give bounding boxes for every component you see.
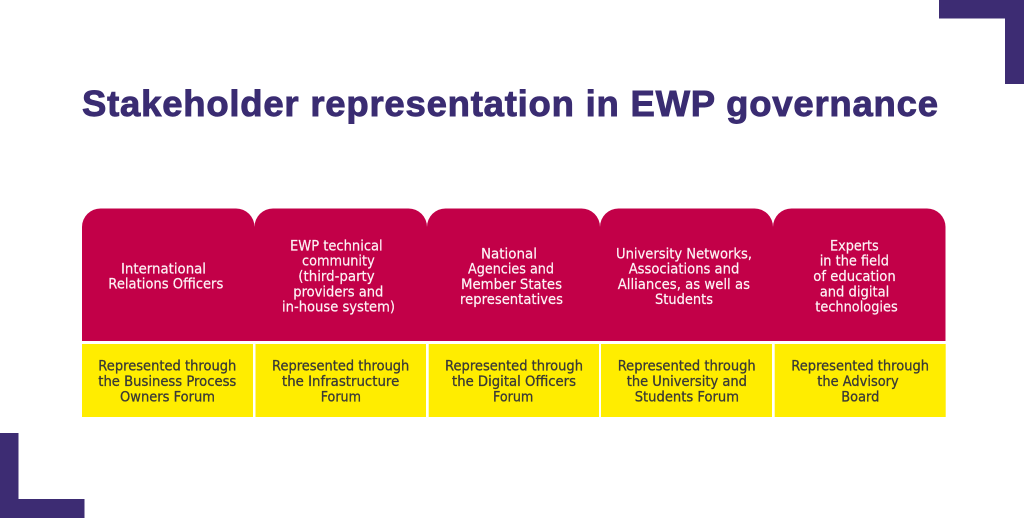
stakeholder text 5: in the field — [820, 254, 889, 270]
forum text 4: Represented through — [618, 359, 756, 375]
forum text 3: Represented through — [445, 359, 583, 375]
stakeholder text 5: of education — [813, 269, 896, 285]
stakeholder tab 1 — [82, 208, 254, 341]
stakeholder tab 5 — [773, 208, 946, 341]
forum text 5: Board — [841, 389, 879, 405]
stakeholder tab 3 — [427, 208, 600, 341]
stakeholder text 3 — [460, 246, 563, 308]
corner bracket: top right — [939, 0, 1024, 84]
forum box 5 — [775, 344, 946, 417]
column 3: National Agencies and Member States representatives — [427, 208, 600, 417]
column 4: University Networks, Associations and Alliances, as well as Students — [600, 208, 773, 417]
forum text 3: Forum — [493, 389, 533, 405]
forum text 3 — [445, 359, 583, 405]
column 2: EWP technical community — [254, 208, 427, 417]
stakeholder text 3: Member States — [461, 277, 562, 293]
stakeholder text 4: Associations and — [629, 262, 739, 278]
forum text 5: the Advisory — [817, 374, 899, 390]
stakeholder text 2: (third-party — [298, 269, 375, 285]
stakeholder text 2: in-house system) — [282, 300, 395, 316]
forum text 2 — [272, 359, 409, 405]
forum text 5 — [791, 359, 929, 405]
forum text 2: Forum — [321, 389, 361, 405]
forum text 5: Represented through — [791, 359, 929, 375]
forum box 2 — [256, 344, 426, 417]
stakeholder text 1 — [108, 261, 223, 293]
stakeholder text 1: International — [121, 261, 206, 277]
column 1: International Relations Officers — [82, 208, 254, 417]
stakeholder text 2: EWP technical — [290, 238, 383, 254]
forum box 4 — [601, 344, 772, 417]
stakeholder text 4: Alliances, as well as — [618, 277, 750, 293]
stakeholder text 5 — [813, 238, 898, 316]
forum box 1 — [82, 344, 253, 417]
stakeholder tab 2 — [254, 208, 427, 341]
forum text 1 — [98, 359, 236, 405]
stakeholder text 2 — [282, 238, 395, 316]
forum text 2: the Infrastructure — [282, 374, 399, 390]
title: Stakeholder representation in EWP governance — [82, 83, 938, 124]
forum text 1: Represented through — [98, 359, 236, 375]
stakeholder text 4: University Networks, — [616, 246, 752, 262]
stakeholder text 2: community — [302, 254, 375, 270]
stakeholder text 5: and digital — [820, 284, 889, 300]
forum box 3 — [429, 344, 599, 417]
stakeholder text 5: Experts — [830, 238, 879, 254]
stakeholder text 3: National — [481, 246, 537, 262]
forum text 4: the University and — [627, 374, 747, 390]
stakeholder tab 4 — [600, 208, 773, 341]
forum text 4 — [618, 359, 756, 405]
forum text 3: the Digital Officers — [452, 374, 576, 390]
forum text 1: the Business Process — [98, 374, 236, 390]
stakeholder text 4: Students — [655, 292, 713, 308]
forum text 2: Represented through — [272, 359, 409, 375]
forum text 4: Students Forum — [635, 389, 739, 405]
stakeholder text 1: Relations Officers — [108, 277, 223, 293]
stakeholder text 5: technologies — [815, 300, 898, 316]
corner bracket: bottom left — [0, 433, 84, 518]
stakeholder text 4 — [616, 246, 752, 308]
forum text 1: Owners Forum — [120, 389, 215, 405]
stakeholder text 2: providers and — [293, 284, 383, 300]
column 5: Experts in the field of education and digital technologies — [773, 208, 946, 417]
stakeholder text 3: Agencies and — [468, 262, 554, 278]
stakeholder text 3: representatives — [460, 292, 563, 308]
